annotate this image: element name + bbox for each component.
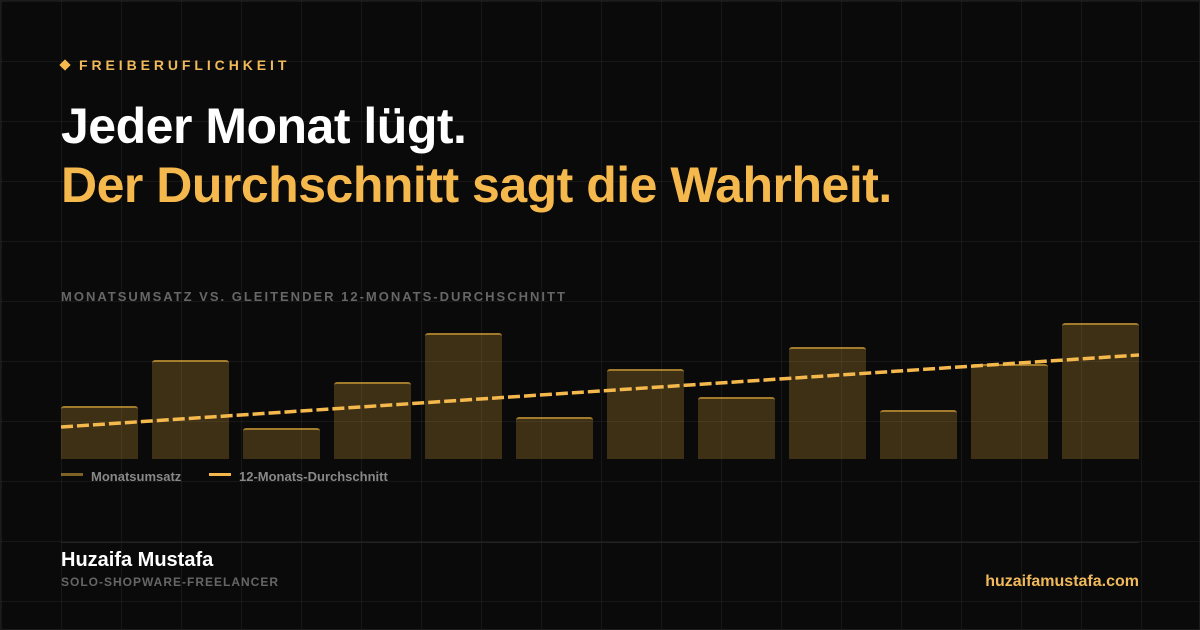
icon: diamond	[59, 59, 71, 71]
bar chart	[60, 323, 1140, 459]
author role: SOLO-SHOPWARE-FREELANCER	[61, 575, 279, 589]
title	[61, 98, 892, 213]
footer divider	[61, 542, 1139, 543]
legend label: average: 12-Monats-Durchschnitt	[239, 469, 388, 484]
author name: Huzaifa Mustafa	[61, 549, 213, 571]
title: Der Durchschnitt sagt die Wahrheit.	[61, 157, 892, 213]
legend	[61, 469, 388, 484]
title: Jeder Monat lügt.	[61, 98, 466, 154]
eyebrow label	[59, 57, 290, 73]
bar 5	[425, 333, 502, 459]
legend swatch: average	[209, 473, 231, 476]
legend swatch: monthly revenue	[61, 473, 83, 476]
eyebrow text: FREIBERUFLICHKEIT	[79, 57, 290, 73]
bar 1	[61, 406, 138, 459]
trend line: 12-month average	[60, 353, 1140, 429]
website: huzaifamustafa.com	[985, 573, 1139, 590]
bar 8	[698, 397, 775, 459]
bar 10	[880, 410, 957, 459]
bar 2	[152, 360, 229, 459]
bar 7	[607, 369, 684, 459]
legend label: monthly revenue: Monatsumsatz	[91, 469, 181, 484]
bar 11	[971, 364, 1048, 459]
bar 9	[789, 347, 866, 459]
bar 12	[1062, 323, 1139, 459]
bar 4	[334, 382, 411, 459]
bar 6	[516, 417, 593, 459]
author block	[61, 549, 279, 589]
bar 3	[243, 428, 320, 459]
chart heading: MONATSUMSATZ VS. GLEITENDER 12-MONATS-DURCHSCHNITT	[61, 289, 567, 304]
